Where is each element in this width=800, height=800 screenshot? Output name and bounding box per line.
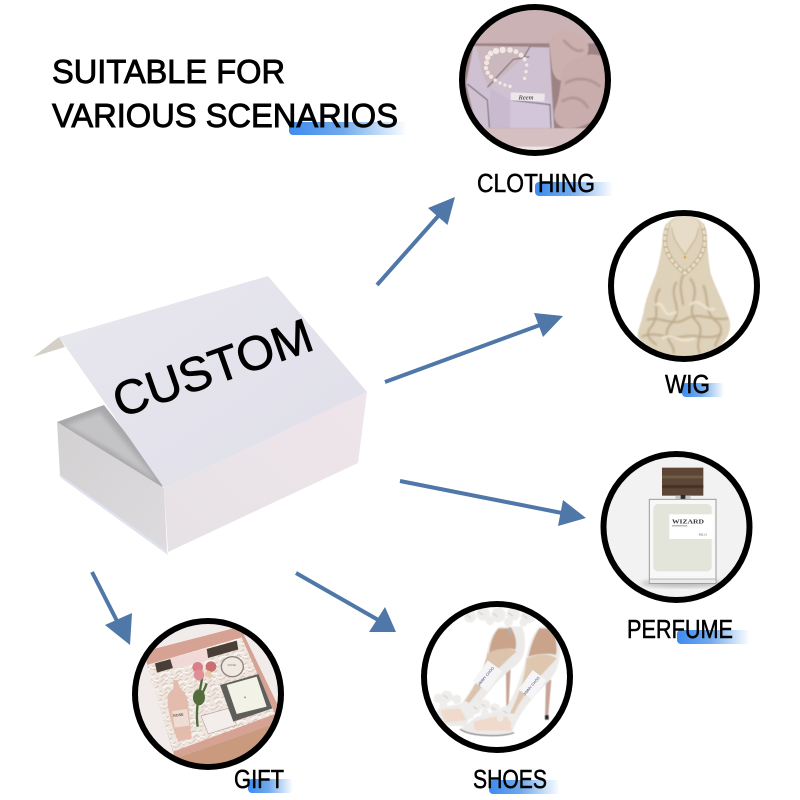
label: perfume: PERFUME	[627, 614, 733, 644]
scenario: gift	[132, 618, 293, 794]
box lid	[59, 276, 367, 488]
label: gift: GIFT	[234, 764, 284, 794]
label: wig: WIG	[665, 369, 710, 399]
arrow: to gift	[92, 572, 132, 645]
box flap	[33, 337, 65, 357]
photo: clothing	[457, 3, 617, 160]
box interior tissue	[57, 405, 165, 490]
photo: shoes: JIMMY CHOO	[477, 666, 495, 687]
arrow: to wig	[385, 313, 563, 382]
photo: gift	[132, 618, 288, 773]
arrow: to shoes	[296, 573, 396, 632]
label: clothing: CLOTHING	[477, 168, 595, 198]
photo: gift: ROSE	[173, 713, 184, 718]
title	[52, 53, 407, 135]
box side	[57, 422, 167, 552]
arrow: to clothing	[377, 197, 455, 285]
label: shoes: SHOES	[473, 764, 547, 794]
photo: shoes	[420, 600, 577, 753]
product: custom box	[33, 276, 367, 555]
scenario: wig	[607, 210, 763, 399]
scenario: clothing	[457, 3, 617, 198]
scenario: perfume	[597, 450, 757, 644]
photo: perfume: WIZARD	[672, 519, 704, 526]
photo: wig	[607, 210, 763, 363]
scenario: shoes	[420, 600, 577, 794]
box lid text: CUSTOM	[106, 309, 320, 428]
photo: perfume	[597, 450, 757, 607]
title: VARIOUS SCENARIOS	[52, 97, 398, 134]
photo: clothing: Reem	[518, 94, 534, 101]
photo: shoes: JIMMY CHOO	[523, 676, 541, 696]
box spine	[164, 392, 367, 552]
arrow: to perfume	[400, 481, 586, 526]
photo: gift: ROSE	[228, 663, 236, 667]
photo: perfume: M|LO	[699, 532, 707, 536]
title: SUITABLE FOR	[52, 53, 285, 90]
